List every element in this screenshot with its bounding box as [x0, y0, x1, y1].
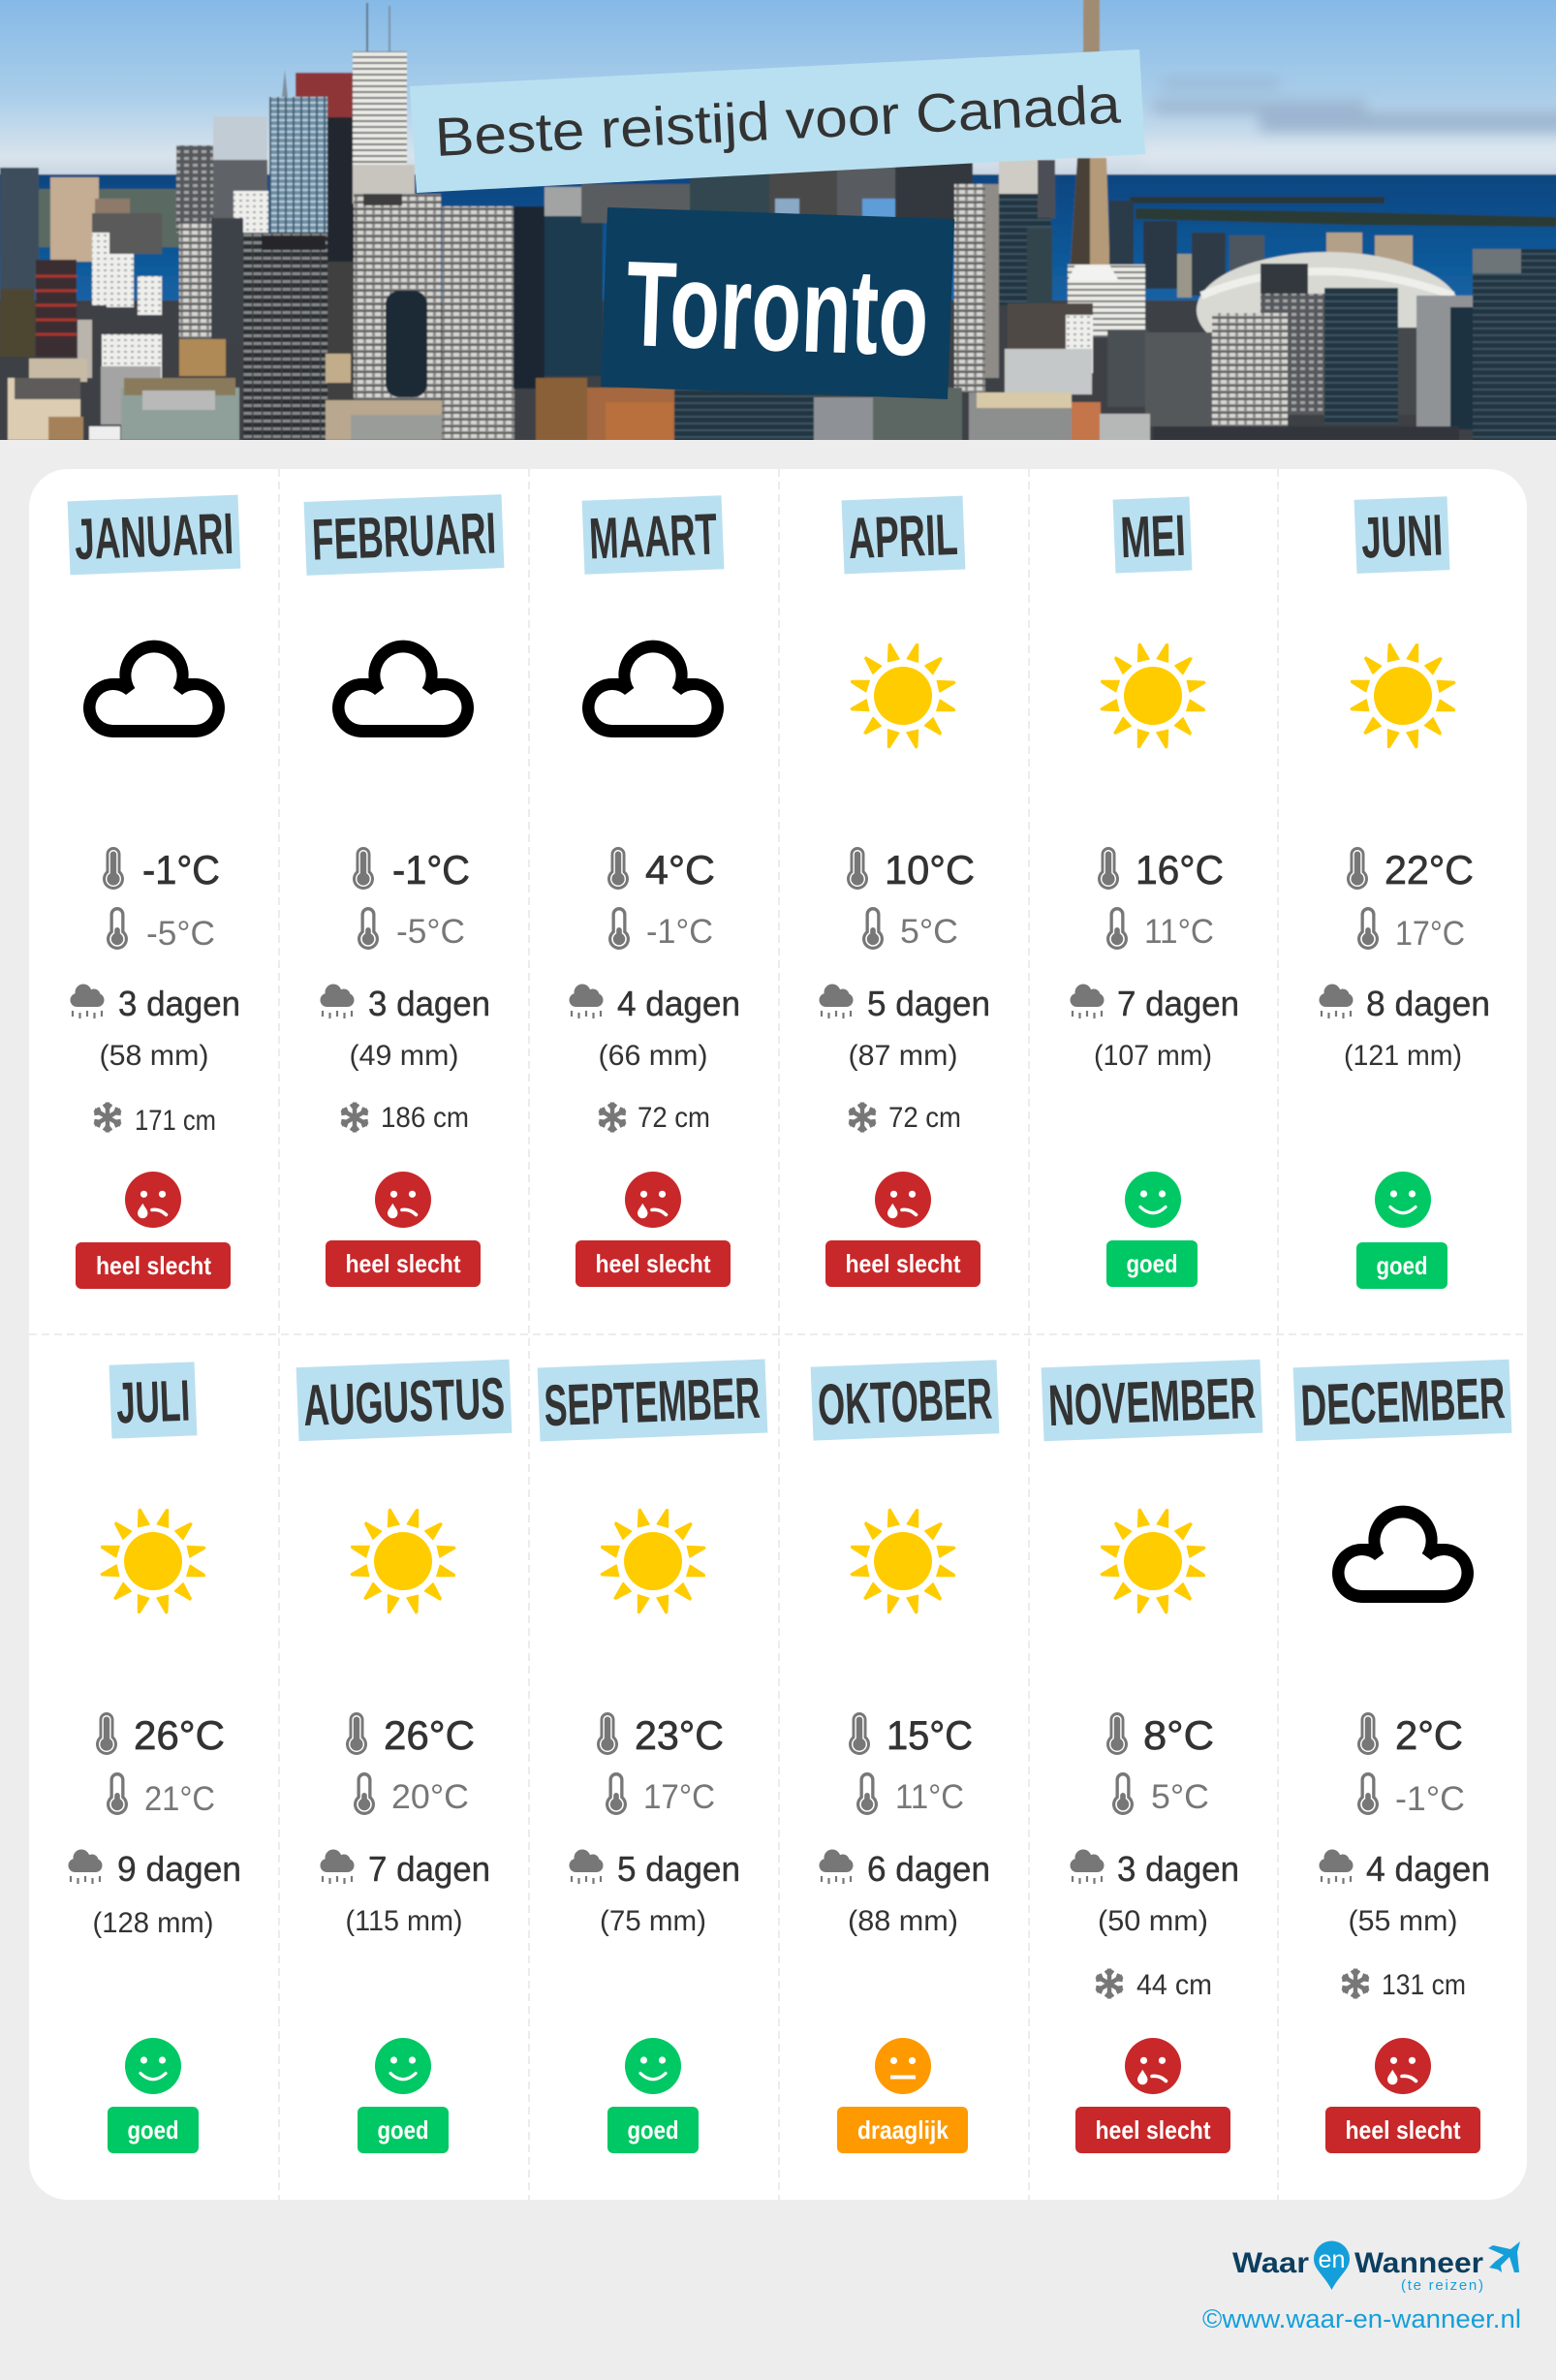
month: augustus: [296, 1360, 512, 2153]
rating: heel slecht: [576, 1172, 731, 1287]
max temperature: -1°C: [142, 847, 220, 892]
min temperature: [1357, 1772, 1465, 1818]
month: januari: [68, 495, 240, 1289]
max temperature: 15°C: [887, 1712, 973, 1758]
rain days: 4 dagen: [1366, 1849, 1490, 1889]
month: oktober: [811, 1360, 999, 2153]
max temperature: [1106, 1712, 1214, 1758]
rating: heel slecht: [825, 1172, 980, 1287]
heading: mei: [1113, 497, 1192, 574]
icon: sun: [351, 1509, 455, 1613]
heading: april: [842, 496, 965, 574]
rainfall: (121 mm): [1344, 1040, 1462, 1072]
rating: heel slecht: heel slecht: [595, 1249, 711, 1278]
snowfall: [598, 1102, 710, 1134]
snowfall: 72 cm: [638, 1102, 710, 1134]
min temperature: [354, 1772, 469, 1816]
rain days: 4 dagen: [617, 984, 740, 1023]
max temperature: [353, 847, 470, 892]
row 2: juli to december: [68, 1360, 1511, 2153]
month: december: [1293, 1360, 1511, 2153]
heading: mei: MEI: [1119, 503, 1187, 570]
title ribbon: Beste reistijd voor Canada: [410, 49, 1145, 193]
min temperature: -1°C: [646, 913, 713, 951]
rainfall: (58 mm): [99, 1040, 209, 1072]
hero photo: Toronto skyline: [0, 0, 1556, 446]
rating: goed: goed: [128, 2115, 178, 2145]
snowfall: [848, 1102, 961, 1134]
rain days: 7 dagen: [1117, 984, 1239, 1023]
rating: goed: [108, 2038, 199, 2153]
rainfall: (88 mm): [848, 1905, 958, 1937]
rainfall: (107 mm): [1094, 1040, 1212, 1072]
snowfall: [340, 1102, 469, 1134]
snowfall: 72 cm: [888, 1102, 961, 1134]
rain days: 7 dagen: [368, 1849, 490, 1889]
heading: juni: [1354, 496, 1449, 574]
icon: cloud: [332, 641, 474, 737]
icon: cloud: [83, 641, 225, 737]
rating: heel slecht: heel slecht: [96, 1251, 211, 1280]
heading: januari: [68, 495, 240, 575]
snowfall: 186 cm: [381, 1102, 469, 1134]
min temperature: -1°C: [1395, 1780, 1465, 1818]
rain days: 6 dagen: [867, 1849, 990, 1889]
rain days: 8 dagen: [1366, 984, 1490, 1023]
rain days: 3 dagen: [118, 984, 240, 1023]
max temperature: [1347, 847, 1474, 892]
snowfall: 171 cm: [135, 1105, 216, 1137]
logo: Waar en Wanneer te reizen: Wanneer: [1354, 2247, 1483, 2279]
max temperature: 26°C: [384, 1712, 475, 1758]
max temperature: [1357, 1712, 1463, 1758]
rating: heel slecht: heel slecht: [345, 1249, 461, 1278]
min temperature: [606, 1772, 715, 1816]
rating: goed: goed: [378, 2115, 428, 2145]
icon: sun: [1101, 643, 1205, 748]
min temperature: [107, 907, 215, 953]
month: februari: [304, 494, 504, 1287]
max temperature: 16°C: [1136, 847, 1224, 892]
rating: draaglijk: [837, 2038, 968, 2153]
min temperature: [107, 1772, 215, 1818]
heading: augustus: [296, 1360, 512, 1441]
max temperature: 4°C: [645, 847, 715, 892]
max temperature: -1°C: [392, 847, 470, 892]
heading: april: APRIL: [847, 502, 959, 571]
icon: sun: [851, 1509, 955, 1613]
rating: heel slecht: [76, 1172, 231, 1289]
min temperature: [856, 1772, 964, 1816]
heading: februari: FEBRUARI: [311, 500, 497, 573]
min temperature: 5°C: [1151, 1778, 1209, 1816]
rain days: 3 dagen: [1117, 1849, 1239, 1889]
rating: heel slecht: heel slecht: [845, 1249, 961, 1278]
rating: heel slecht: heel slecht: [1345, 2115, 1461, 2145]
heading: juli: [109, 1362, 197, 1439]
rating: goed: goed: [1376, 1251, 1428, 1280]
icon: sun: [1351, 643, 1455, 748]
rainfall: (55 mm): [1349, 1905, 1457, 1937]
max temperature: [103, 847, 220, 892]
city name box: Toronto: Toronto: [624, 236, 931, 382]
heading: oktober: OKTOBER: [817, 1365, 993, 1437]
rating: goed: [1106, 1172, 1198, 1287]
min temperature: 11°C: [1144, 913, 1214, 951]
icon: sun: [1101, 1509, 1205, 1613]
heading: september: [538, 1360, 767, 1442]
heading: januari: JANUARI: [74, 501, 234, 572]
max temperature: 8°C: [1143, 1712, 1214, 1758]
rating: heel slecht: [1325, 2038, 1480, 2153]
snowfall: 131 cm: [1382, 1969, 1466, 2001]
min temperature: [608, 907, 713, 951]
min temperature: 11°C: [895, 1778, 964, 1816]
rainfall: (75 mm): [600, 1905, 706, 1937]
icon: sun: [601, 1509, 705, 1613]
min temperature: 17°C: [1395, 915, 1465, 953]
max temperature: [1098, 847, 1224, 892]
month: juni: [1320, 496, 1490, 1289]
month: mei: [1070, 497, 1239, 1287]
logo: Waar en Wanneer te reizen: [1232, 2240, 1520, 2294]
month: november: [1042, 1360, 1262, 2153]
logo: Waar en Wanneer te reizen: Waar: [1232, 2247, 1309, 2279]
heading: juli: JULI: [115, 1368, 191, 1435]
min temperature: [1357, 907, 1465, 953]
city name box: Toronto: [601, 207, 954, 399]
rating: goed: [1356, 1172, 1447, 1289]
icon: cloud: [1332, 1506, 1474, 1603]
min temperature: [862, 907, 958, 951]
snowfall: [1095, 1969, 1212, 2001]
max temperature: [607, 847, 715, 892]
rainfall: (66 mm): [599, 1040, 707, 1072]
logo: Waar en Wanneer te reizen: en: [1318, 2246, 1345, 2273]
rain days: 5 dagen: [617, 1849, 740, 1889]
heading: maart: [582, 495, 724, 575]
title ribbon: Beste reistijd voor Canada: Beste reistijd voor Canada: [434, 73, 1123, 168]
icon: cloud: [582, 641, 724, 737]
max temperature: [849, 1712, 973, 1758]
panel: monthly climate table: [29, 469, 1527, 2200]
rainfall: (50 mm): [1098, 1905, 1208, 1937]
max temperature: 22°C: [1385, 847, 1474, 892]
min temperature: [1106, 907, 1214, 951]
min temperature: 20°C: [391, 1778, 469, 1816]
max temperature: 23°C: [635, 1712, 724, 1758]
heading: september: SEPTEMBER: [543, 1365, 762, 1438]
max temperature: 26°C: [134, 1712, 225, 1758]
snowfall: [93, 1103, 216, 1137]
min temperature: [358, 907, 465, 951]
rain days: 9 dagen: [117, 1849, 241, 1889]
source url: ©www.waar-en-wanneer.nl: [1202, 2304, 1521, 2333]
rain days: 3 dagen: [368, 984, 490, 1023]
month: maart: [570, 495, 740, 1287]
rainfall: (115 mm): [345, 1905, 463, 1937]
rainfall: (87 mm): [849, 1040, 957, 1072]
rating: goed: [358, 2038, 449, 2153]
rating: goed: goed: [628, 2115, 678, 2145]
heading: oktober: [811, 1360, 999, 1441]
max temperature: 10°C: [885, 847, 975, 892]
rating: heel slecht: [326, 1172, 481, 1287]
min temperature: 5°C: [900, 913, 958, 951]
max temperature: [597, 1712, 724, 1758]
min temperature: 17°C: [643, 1778, 715, 1816]
heading: februari: [304, 494, 504, 576]
rating: heel slecht: heel slecht: [1095, 2115, 1211, 2145]
heading: november: NOVEMBER: [1047, 1365, 1257, 1438]
month: april: [820, 496, 990, 1287]
min temperature: -5°C: [396, 913, 465, 951]
row 1: januari to juni: [68, 494, 1490, 1289]
rain days: 5 dagen: [867, 984, 990, 1023]
rating: goed: goed: [1126, 1249, 1178, 1278]
icon: sun: [101, 1509, 205, 1613]
rating: draaglijk: draaglijk: [857, 2115, 949, 2145]
heading: augustus: AUGUSTUS: [302, 1365, 506, 1438]
month: juli: [68, 1362, 241, 2153]
min temperature: 21°C: [144, 1780, 215, 1818]
snowfall: 44 cm: [1136, 1969, 1212, 2001]
heading: maart: MAART: [588, 501, 718, 572]
heading: november: [1042, 1360, 1262, 1441]
logo: Waar en Wanneer te reizen: (te reizen): [1401, 2277, 1483, 2294]
max temperature: 2°C: [1395, 1712, 1463, 1758]
heading: juni: JUNI: [1360, 502, 1444, 571]
rating: goed: [607, 2038, 699, 2153]
snowfall: [1341, 1969, 1466, 2001]
rainfall: (128 mm): [93, 1907, 213, 1939]
min temperature: [1112, 1772, 1209, 1816]
min temperature: -5°C: [146, 915, 215, 953]
rating: heel slecht: [1075, 2038, 1230, 2153]
rainfall: (49 mm): [349, 1040, 459, 1072]
month: september: [538, 1360, 767, 2153]
icon: sun: [851, 643, 955, 748]
